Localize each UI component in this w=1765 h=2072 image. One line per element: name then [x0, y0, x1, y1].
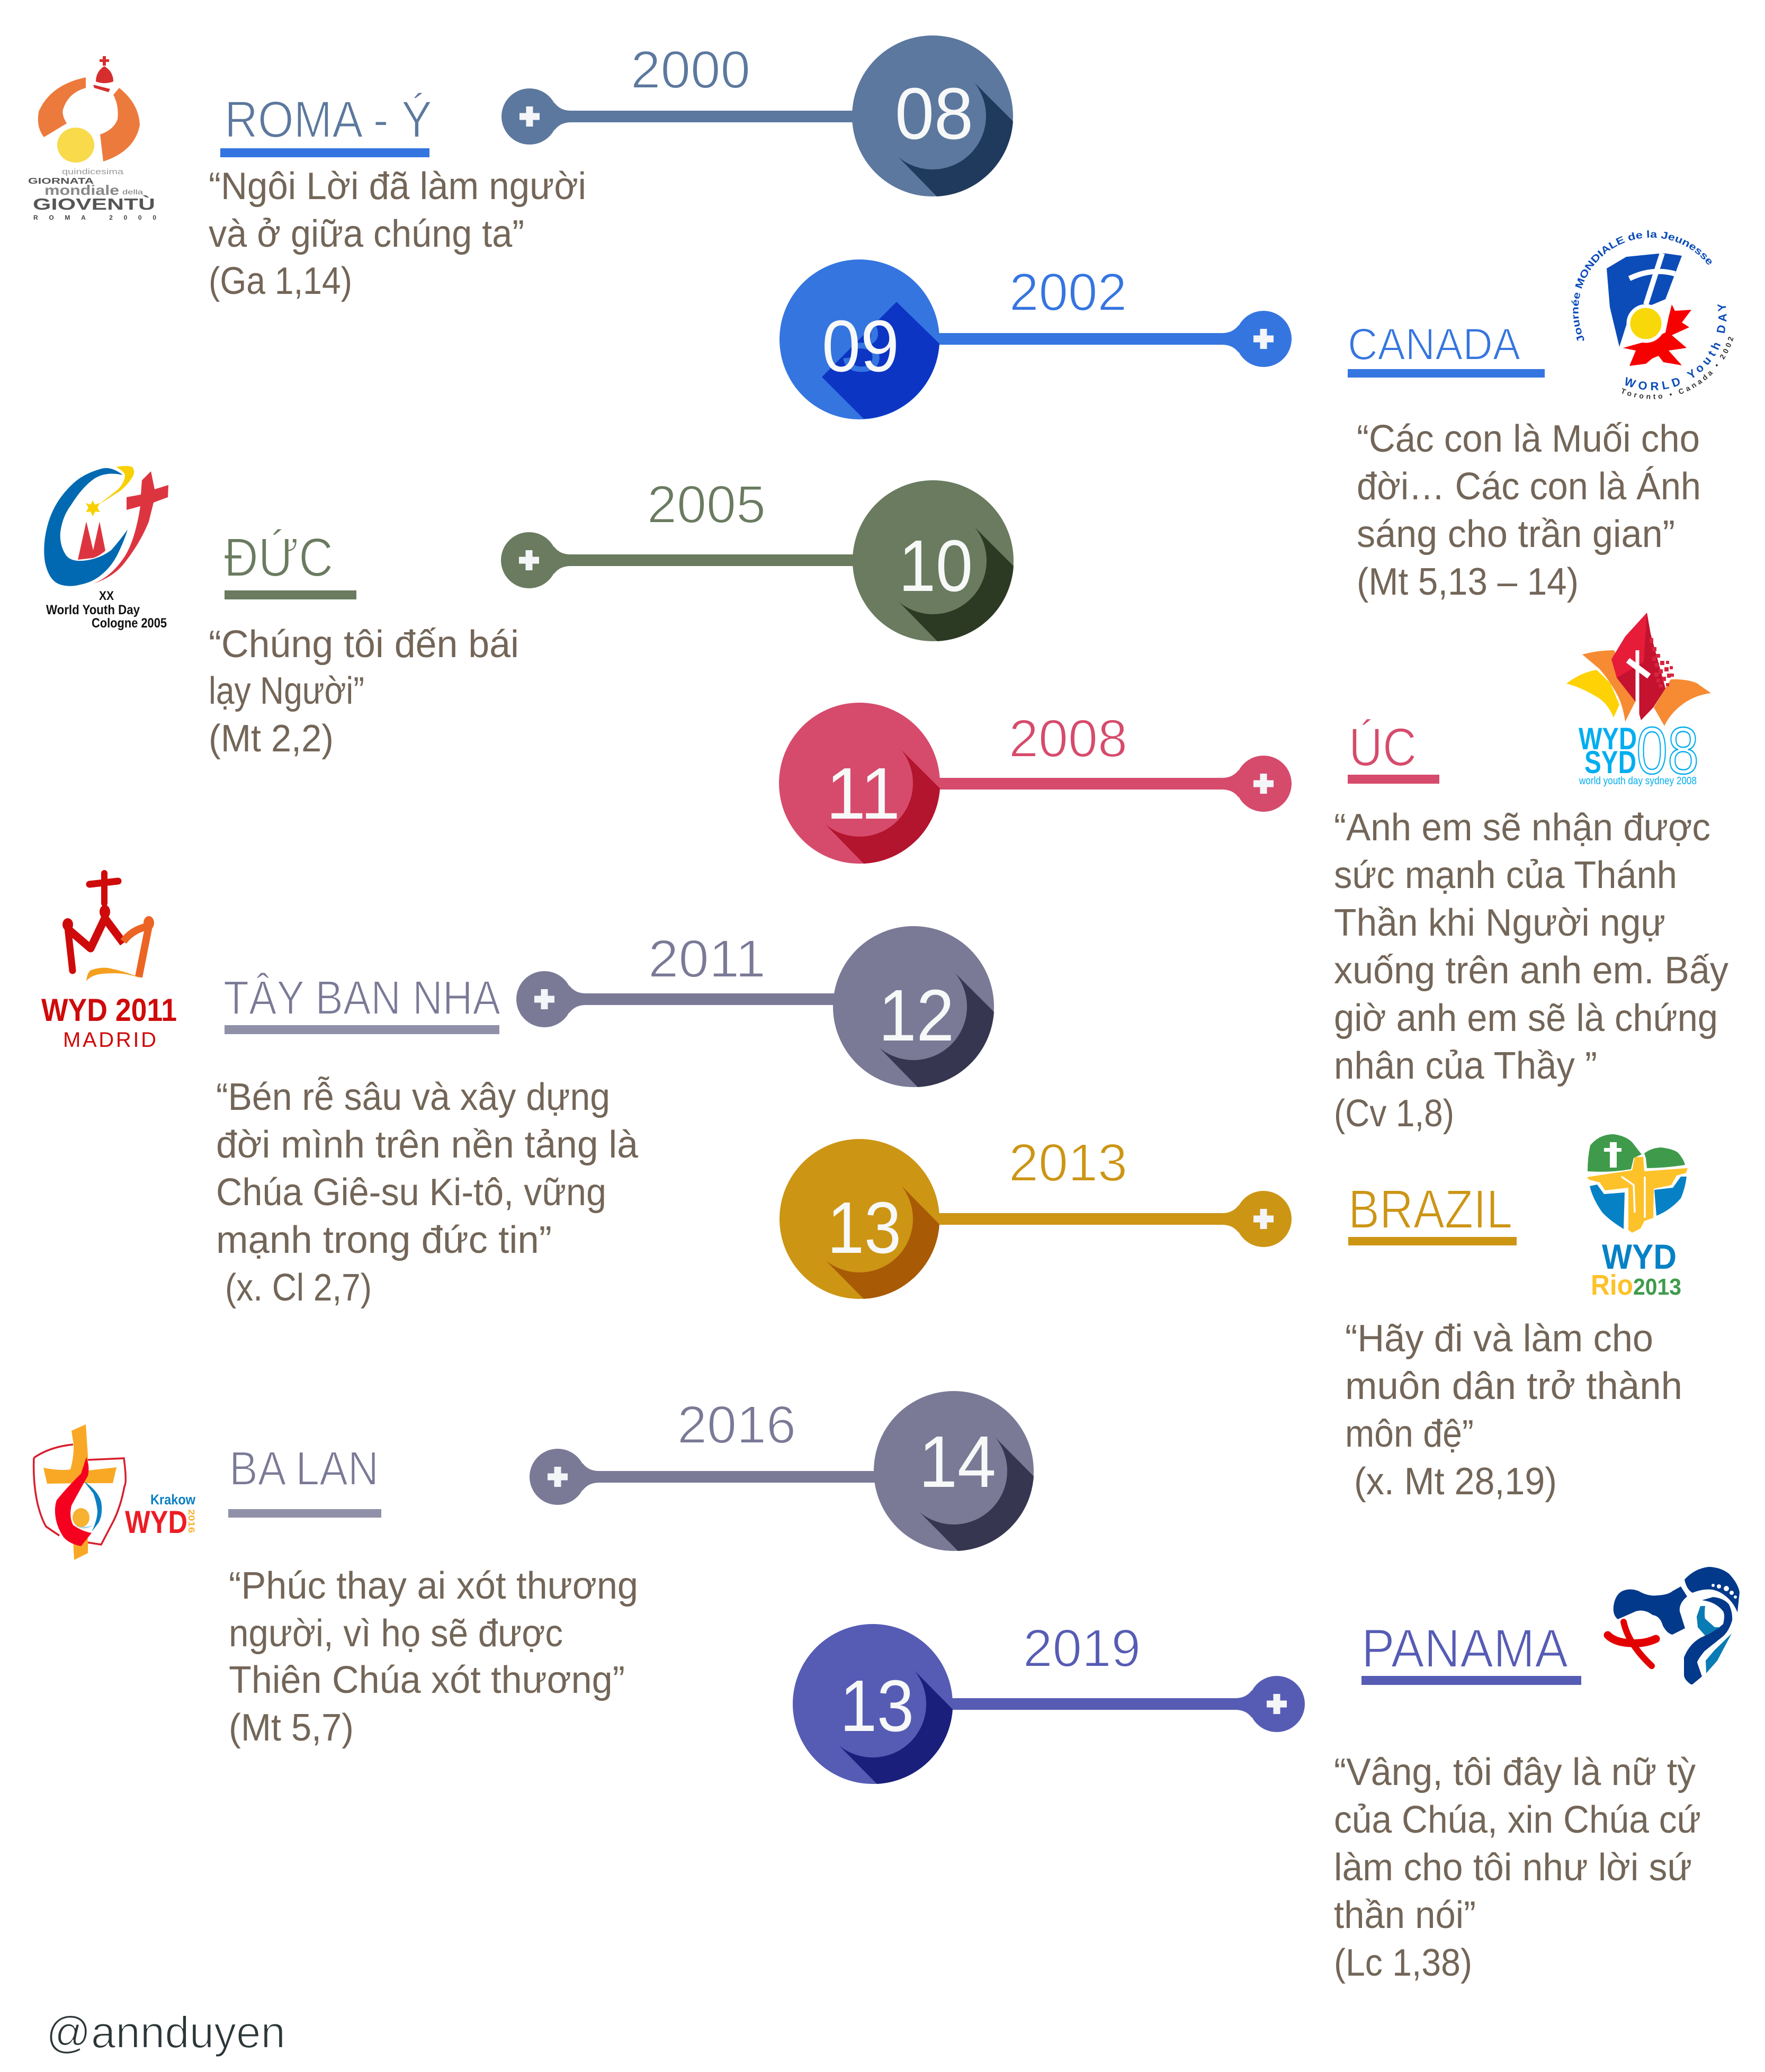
logo Madrid 2011: WYD 2011 — [41, 992, 177, 1028]
quote Australia: Thần khi Người ngự — [1334, 902, 1665, 944]
circle 09: 3 — [840, 306, 883, 387]
heading Australia: ÚC — [1349, 717, 1417, 777]
logo Sydney 2008: world youth day sydney 2008 — [1579, 775, 1697, 787]
quote Roma — [209, 165, 586, 302]
quote Germany: “Chúng tôi đến bái — [209, 623, 519, 666]
quote Australia: xuống trên anh em. Bấy — [1334, 949, 1728, 992]
logo Sydney 2008 — [1566, 613, 1711, 788]
timeline 2005 — [501, 475, 1014, 641]
logo Cologne 2005 — [44, 466, 168, 631]
heading Spain: TÂY BAN NHA — [223, 972, 500, 1025]
logo Krakow 2016: WYD — [125, 1504, 187, 1540]
quote Poland: Thiên Chúa xót thương” — [229, 1659, 625, 1701]
quote Australia: (Cv 1,8) — [1334, 1092, 1454, 1135]
quote Spain: “Bén rễ sâu và xây dựng — [216, 1076, 610, 1118]
heading Canada: CANADA — [1348, 319, 1520, 369]
quote Panama: của Chúa, xin Chúa cứ — [1334, 1799, 1701, 1841]
knob plus 2002 — [1222, 311, 1292, 367]
quote Poland: người, vì họ sẽ được — [229, 1612, 563, 1655]
logo Sydney 2008: 08 — [1636, 714, 1699, 788]
logo Canada 2002 — [1572, 230, 1734, 399]
logo Cologne 2005: World Youth Day — [46, 603, 140, 617]
number 09: 09 — [822, 306, 899, 387]
logo Roma 2000: ROMA 2000 — [33, 214, 156, 221]
quote Brazil — [1345, 1317, 1682, 1503]
quote Poland: (Mt 5,7) — [229, 1707, 354, 1749]
author credit: @annduyen — [46, 2007, 285, 2057]
circle 13 second — [793, 1624, 953, 1784]
number 12: 12 — [879, 975, 954, 1056]
quote Roma: và ở giữa chúng ta” — [209, 213, 524, 255]
quote Panama — [1334, 1751, 1701, 1984]
number 08: 08 — [895, 73, 973, 155]
quote Brazil: muôn dân trở thành — [1345, 1365, 1682, 1407]
year 2000: 2000 — [631, 40, 750, 100]
quote Brazil: môn đệ” — [1345, 1413, 1474, 1455]
logo Madrid 2011: MADRID — [63, 1028, 156, 1052]
quote Panama: làm cho tôi như lời sứ — [1334, 1846, 1692, 1889]
heading Poland: BA LAN — [229, 1442, 379, 1495]
logo Canada 2002: WORLD Youth DAY — [1626, 304, 1726, 391]
quote Spain: Chúa Giê-su Ki-tô, vững — [216, 1171, 606, 1214]
logo Rio 2013: Rio — [1591, 1269, 1633, 1301]
quote Roma: “Ngôi Lời đã làm người — [209, 165, 586, 208]
timeline 2008 — [779, 703, 1292, 864]
quote Panama: (Lc 1,38) — [1334, 1942, 1472, 1984]
logo Madrid 2011 — [41, 873, 177, 1052]
quote Germany — [209, 623, 519, 760]
quote Spain: mạnh trong đức tin” — [216, 1219, 552, 1261]
year 2005: 2005 — [647, 475, 766, 534]
quote Australia: nhân của Thầy ” — [1334, 1045, 1597, 1087]
circle 08 — [852, 35, 1013, 196]
year 2013: 2013 — [1009, 1133, 1127, 1192]
timeline 2011 — [516, 926, 994, 1087]
knob plus 2016 — [530, 1449, 599, 1505]
year 2011: 2011 — [648, 929, 766, 989]
heading Germany: ĐỨC — [224, 527, 333, 588]
logo Roma 2000: GIORNATA — [28, 177, 94, 186]
year 2019: 2019 — [1023, 1619, 1141, 1678]
quote Australia — [1334, 806, 1728, 1135]
timeline 2013 — [780, 1133, 1292, 1299]
logo Roma 2000: della — [122, 188, 144, 196]
knob plus 2008 — [1222, 756, 1292, 812]
logo Rio 2013 — [1587, 1134, 1688, 1301]
quote Poland: “Phúc thay ai xót thương — [229, 1565, 638, 1607]
number 11: 11 — [826, 753, 900, 835]
logo Sydney 2008: WYD — [1579, 722, 1637, 756]
quote Spain: (x. Cl 2,7) — [225, 1267, 372, 1309]
quote Poland — [229, 1565, 638, 1749]
logo Rio 2013: WYD — [1602, 1237, 1677, 1276]
circle 12 — [833, 926, 994, 1087]
quote Germany: lạy Người” — [209, 670, 364, 712]
logo Sydney 2008: SYD — [1584, 745, 1636, 780]
heading Brazil: BRAZIL — [1348, 1179, 1512, 1240]
knob plus 2011 — [516, 971, 586, 1027]
quote Panama: thần nói” — [1334, 1894, 1476, 1936]
quote Germany: (Mt 2,2) — [209, 717, 334, 760]
logo Cologne 2005: Cologne 2005 — [92, 616, 167, 631]
number 14: 14 — [919, 1421, 996, 1503]
logo Roma 2000: mondiale — [44, 182, 119, 198]
heading Roma: ROMA - Ý — [225, 91, 432, 148]
logo Krakow 2016: 2016 — [186, 1509, 196, 1533]
heading Panama: PANAMA — [1361, 1618, 1568, 1679]
circle 11 — [779, 703, 940, 864]
circle 14 — [874, 1391, 1034, 1551]
timeline 2019 — [793, 1619, 1305, 1784]
quote Australia: giờ anh em sẽ là chứng — [1334, 997, 1718, 1039]
timeline 2000 — [501, 35, 1013, 196]
year 2016: 2016 — [677, 1395, 796, 1455]
quote Canada: đời… Các con là Ánh — [1357, 465, 1701, 508]
quote Brazil: “Hãy đi và làm cho — [1345, 1317, 1653, 1360]
logo Roma 2000 — [28, 56, 156, 221]
quote Spain: đời mình trên nền tảng là — [216, 1124, 639, 1166]
year 2008: 2008 — [1009, 709, 1127, 768]
quote Brazil: (x. Mt 28,19) — [1354, 1460, 1557, 1503]
timeline 2016 — [530, 1391, 1034, 1551]
quote Roma: (Ga 1,14) — [209, 260, 352, 302]
circle 13 — [780, 1139, 939, 1299]
logo Krakow 2016 — [34, 1424, 196, 1560]
logo Panama 2019 — [1608, 1567, 1740, 1684]
quote Canada: sáng cho trần gian” — [1357, 513, 1675, 555]
logo Canada 2002: Journée MONDIALE de la Jeunesse — [1572, 230, 1712, 341]
year 2002: 2002 — [1009, 263, 1127, 322]
logo Roma 2000: GIOVENTÙ — [33, 194, 155, 213]
knob plus 2000 — [501, 88, 571, 145]
logo Cologne 2005: XX — [99, 589, 114, 603]
timeline 2002 — [780, 259, 1292, 419]
quote Canada — [1357, 418, 1701, 603]
logo Rio 2013: 2013 — [1633, 1274, 1681, 1300]
number 10: 10 — [899, 525, 973, 607]
quote Spain — [216, 1076, 639, 1309]
logo Canada 2002: Toronto • Canada • 2002 — [1621, 337, 1734, 399]
quote Canada: (Mt 5,13 – 14) — [1357, 561, 1579, 603]
number 13 second: 13 — [840, 1665, 914, 1747]
quote Australia: “Anh em sẽ nhận được — [1334, 806, 1710, 849]
quote Panama: “Vâng, tôi đây là nữ tỳ — [1334, 1751, 1696, 1793]
quote Australia: sức mạnh của Thánh — [1334, 854, 1677, 896]
logo Roma 2000: quindicesima — [62, 167, 124, 176]
knob plus 2013 — [1222, 1191, 1292, 1247]
circle 09 — [780, 259, 939, 419]
quote Canada: “Các con là Muối cho — [1357, 418, 1700, 460]
logo Krakow 2016: Krakow — [150, 1492, 196, 1508]
knob plus 2019 — [1235, 1676, 1305, 1732]
circle 10 — [853, 480, 1014, 641]
knob plus 2005 — [501, 532, 570, 588]
number 13: 13 — [827, 1187, 901, 1269]
